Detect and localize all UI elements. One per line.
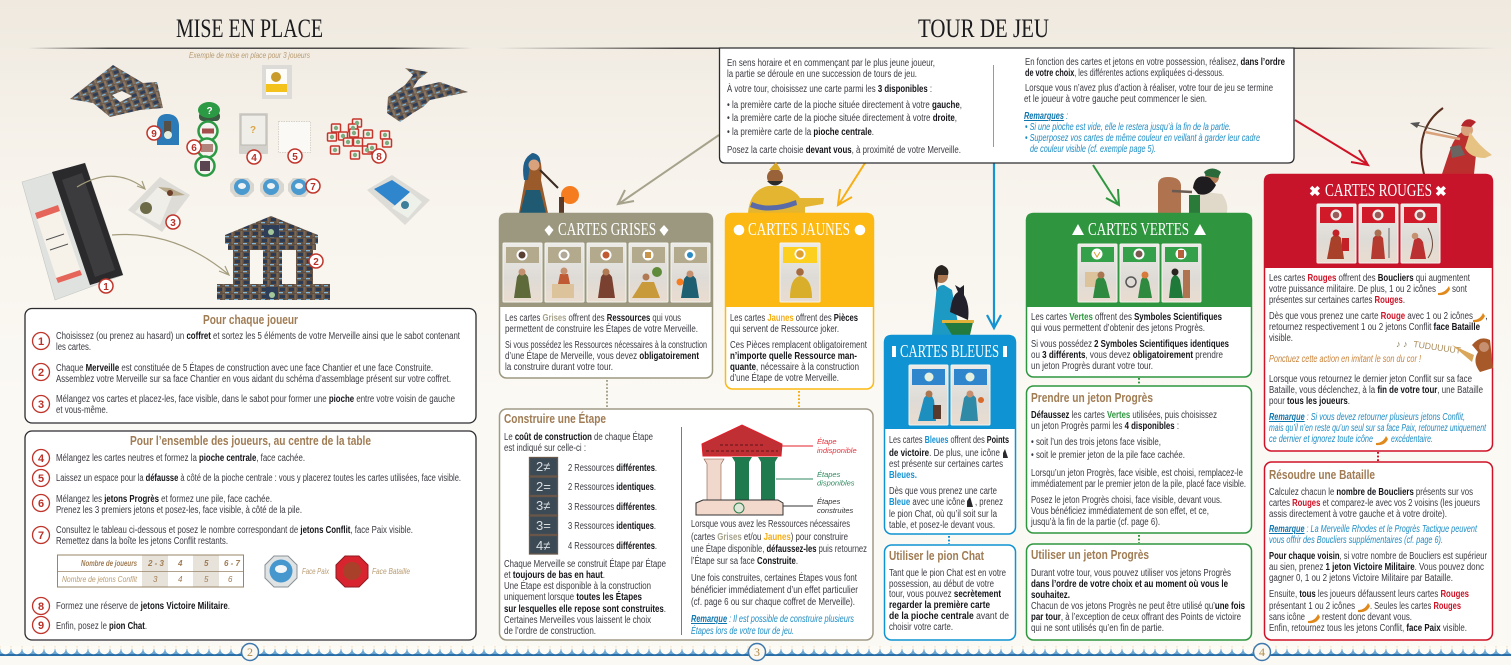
cost tiles: 2≠ — [536, 459, 550, 474]
figure: sculptor — [1158, 168, 1227, 215]
setup number markers: 8 — [376, 152, 382, 163]
description: Ces Pièces remplacent obligatoirement — [730, 340, 867, 351]
heading: Utiliser le pion Chat — [889, 548, 985, 563]
page number 3: 3 — [754, 645, 760, 659]
description — [1031, 312, 1229, 372]
description: Les cartes Vertes offrent des Symboles Scientifiques — [1031, 312, 1222, 323]
step 9: 9 — [38, 620, 44, 632]
description: Défaussez les cartes Vertes utilisées, puis choisissez — [1031, 410, 1217, 421]
arrow: green cards — [1093, 165, 1119, 205]
right column: Lorsque vous avez les Ressources nécessaires — [691, 519, 850, 530]
conflict tokens — [230, 178, 310, 197]
description: Si vous possédez 2 Symboles Scientifiques identiques — [1031, 339, 1229, 350]
description: un jeton Progrès durant votre tour. — [1031, 361, 1153, 372]
description — [1269, 273, 1488, 445]
panel: pour l'ensemble des joueurs — [25, 431, 476, 640]
description: Tant que le pion Chat est en votre — [889, 568, 1006, 579]
right column: En fonction des cartes et jetons en votre possession, réalisez, dans l’ordre — [1025, 57, 1285, 68]
table: conflict tokens per player count: 5 — [204, 575, 209, 584]
cost labels: 3 Ressources identiques. — [568, 521, 656, 532]
description — [889, 568, 1009, 633]
step 7: Remettez dans la boîte les jetons Conflit restants. — [56, 536, 228, 547]
description: Ponctuez cette action en imitant le son du cor ! — [1269, 354, 1421, 365]
label: unavailable: Étape — [817, 437, 837, 446]
table: conflict tokens per player count — [58, 555, 244, 587]
right column — [1024, 57, 1285, 155]
panel: cartes grises — [499, 213, 713, 378]
description: • soit le premier jeton de la pile face cachée. — [1031, 450, 1185, 461]
page number 4 — [1254, 644, 1270, 660]
page number 2 — [242, 644, 258, 660]
table: conflict tokens per player count: 6 - 7 — [224, 559, 241, 568]
progress tokens: ? — [206, 106, 213, 117]
description: retournez respectivement 1 ou 2 jetons Conflit face Bataille — [1269, 322, 1480, 333]
heading: CARTES GRISES — [558, 219, 656, 239]
table: conflict tokens per player count: 6 — [228, 575, 233, 584]
description: Les cartes Grises offrent des Ressources qui vous — [505, 313, 681, 324]
cost labels: 2 Ressources différentes. — [568, 463, 657, 474]
description: Dès que vous prenez une carte Rouge avec 1 ou 2 icônes — [1269, 311, 1473, 322]
figure: glassblower — [519, 153, 579, 219]
left column: et toujours de bas en haut. — [504, 570, 605, 581]
description: regarder la première carte — [889, 600, 990, 611]
description: restent donc devant vous. — [1322, 612, 1412, 623]
description: Chacun de vos jetons Progrès ne peut être utilisé qu’une fois — [1031, 601, 1245, 612]
step 6: Mélangez les jetons Progrès et formez une pile, face cachée. — [56, 494, 272, 505]
step 3 — [32, 394, 455, 416]
description: permettent de construire les Étapes de votre Merveille. — [505, 322, 698, 335]
cost tiles: 2= — [536, 479, 551, 494]
description: pour tous les joueurs. — [1269, 396, 1350, 407]
description: Lorsqu’un jeton Progrès, face visible, est choisi, remplacez-le — [1031, 468, 1243, 479]
description: assis directement à votre gauche et à votre droite). — [1269, 509, 1447, 520]
title: Tour de jeu: TOUR DE JEU — [918, 14, 1049, 43]
illustration: game setup for 3 players — [22, 65, 468, 300]
cost labels — [568, 463, 657, 552]
right column: une Étape disponible, défaussez-les puis retournez — [691, 542, 867, 555]
step 9 — [32, 616, 147, 634]
panel: cartes jaunes — [725, 213, 874, 389]
description: ou 3 différents, vous devez obligatoirement prendre — [1031, 350, 1223, 361]
page number 3 — [748, 644, 766, 660]
description: souhaitez. — [1031, 590, 1070, 601]
description: Les cartes Jaunes offrent des Pièces — [730, 313, 858, 324]
setup number markers: 5 — [292, 152, 298, 163]
cost tiles: 3≠ — [536, 498, 550, 513]
setup number markers: 3 — [170, 218, 176, 229]
step 3: 3 — [38, 399, 44, 411]
description — [889, 435, 1009, 531]
cost tiles: 3= — [536, 518, 551, 533]
step 8: Formez une réserve de jetons Victoire Militaire. — [56, 601, 230, 612]
description: , prenez — [975, 497, 1003, 508]
heading: CARTES VERTES — [1088, 219, 1189, 239]
right column: de couleur visible (cf. exemple page 5). — [1030, 144, 1156, 155]
cost labels: 4 Ressources différentes. — [568, 541, 657, 552]
figure: priestess with cat — [932, 265, 974, 335]
description: d’une Étape de votre Merveille. — [730, 371, 839, 384]
description: jusqu’à la fin de la partie (cf. page 6). — [1030, 517, 1160, 528]
description — [1031, 568, 1245, 634]
right column: Remarques : — [1024, 111, 1068, 122]
cost labels: 2 Ressources identiques. — [568, 482, 656, 493]
heading: ✖ — [1309, 185, 1321, 200]
cost labels: 3 Ressources différentes. — [568, 502, 657, 513]
step 6: Prenez les 3 premiers jetons et posez-les, face visible, à côté de la pile. — [56, 505, 302, 516]
left column: de l’ordre de construction. — [504, 626, 596, 637]
page number 4: 4 — [1259, 645, 1265, 659]
discard space — [278, 122, 310, 152]
label: available: Étapes — [817, 470, 840, 479]
herald with horn — [1396, 338, 1493, 372]
heading: CARTES BLEUES — [900, 341, 999, 361]
right column: bénéficier immédiatement d’un effet particulier — [691, 585, 859, 596]
description: table, et posez-le devant vous. — [889, 520, 995, 531]
step 1: 1 — [38, 336, 44, 348]
description: présentes sur certaines cartes Rouges. — [1269, 295, 1405, 306]
description: Si vous possédez les Ressources nécessaires à la construction — [505, 340, 707, 351]
cards — [1078, 244, 1201, 302]
left draw deck — [128, 177, 190, 232]
footer band — [0, 646, 1511, 656]
description: Bleues. — [889, 470, 917, 481]
setup number markers: 7 — [310, 182, 316, 193]
description: est présente sur certaines cartes — [889, 459, 1003, 470]
description: Les cartes Bleues offrent des Points — [889, 435, 1009, 446]
progress tokens — [196, 102, 220, 176]
cards — [503, 243, 710, 302]
panel: pour chaque joueur — [25, 308, 476, 423]
subtitle: example caption: Exemple de mise en place pour 3 joueurs — [189, 50, 311, 60]
step 4: Mélangez les cartes neutres et formez la pioche centrale, face cachée. — [56, 453, 305, 464]
left column: Chaque Merveille se construit Étape par Étape — [504, 557, 666, 570]
table: conflict tokens per player count: Nombre de joueurs — [81, 559, 137, 568]
central draw pile — [239, 113, 268, 154]
right draw deck — [367, 175, 430, 225]
left column: Posez la carte choisie devant vous, à proximité de votre Merveille. — [727, 145, 961, 156]
setup number markers: 2 — [313, 257, 319, 268]
right column: Étapes lors de votre tour de jeu. — [691, 624, 794, 637]
step 6 — [32, 494, 302, 516]
right column: • Si une pioche est vide, elle le restera jusqu’à la fin de la partie. — [1025, 122, 1231, 133]
step 5 — [32, 470, 461, 486]
heading: Prendre un jeton Progrès — [1031, 390, 1153, 405]
left column: sur lesquelles elle repose sont construites. — [504, 604, 666, 615]
step 9: Enfin, posez le pion Chat. — [56, 621, 147, 632]
arrow: tray to wonder — [112, 234, 229, 275]
step 1 — [32, 331, 460, 353]
heading: CARTES JAUNES — [748, 219, 850, 239]
setup number markers: 6 — [191, 143, 197, 154]
yellow draw deck — [262, 65, 292, 99]
token: battle face — [336, 556, 410, 587]
right column: (cf. page 6 ou sur chaque coffret de Merveille). — [691, 597, 855, 608]
description: par tour, à l’exception de ceux offrant des Points de victoire — [1031, 612, 1241, 623]
panel: intro — [720, 48, 1294, 163]
description — [1030, 410, 1246, 528]
heading: Pour chaque joueur — [203, 312, 298, 327]
arrow: blue cards — [987, 163, 1001, 328]
description: possession, au début de votre — [889, 579, 994, 590]
heading: Construire une Étape — [504, 411, 606, 426]
description: n’importe quelle Ressource man- — [730, 351, 857, 362]
arrow: yellow cards — [838, 163, 865, 205]
description: immédiatement par le premier jeton de la pile, placé face visible. — [1031, 479, 1246, 490]
figure: archer — [1410, 108, 1492, 178]
token: battle face: Face Bataille — [372, 566, 410, 576]
arrow: grey cards — [618, 135, 719, 204]
title: Mise en place: MISE EN PLACE — [176, 14, 323, 43]
left column: est indiqué sur celle-ci : — [504, 443, 586, 454]
description: le pion Chat, où qu’il soit sur la — [889, 509, 997, 520]
step 5: 5 — [38, 473, 44, 485]
panel: prendre un jeton progrès — [1026, 386, 1252, 533]
heading: Pour l’ensemble des joueurs, au centre de la table — [130, 433, 371, 448]
right column: Lorsque vous n’avez plus d’action à réaliser, votre tour de jeu se termine — [1025, 83, 1273, 94]
step 7: 7 — [38, 530, 44, 542]
arrow: red cards — [1295, 120, 1368, 165]
description: qui ne sont utilisés qu’en fin de partie. — [1031, 623, 1164, 634]
table: conflict tokens per player count: Nombre de jetons Conflit — [62, 575, 138, 584]
panel: cartes rouges — [1264, 174, 1493, 451]
description: présentant 1 ou 2 icônes — [1269, 601, 1355, 612]
cat pawn — [157, 114, 179, 145]
description — [505, 313, 707, 373]
description: Les cartes Rouges offrent des Boucliers qui augmentent — [1269, 273, 1470, 284]
token: peace face: Face Paix — [302, 566, 330, 576]
panel: cartes vertes — [1026, 213, 1252, 377]
wonder: top-left — [70, 65, 163, 117]
description: visible. — [1269, 333, 1293, 344]
herald with horn: TUDUUUUT — [1413, 339, 1462, 356]
cards — [1317, 204, 1440, 263]
temple diagram — [696, 425, 857, 515]
description: tour, vous pouvez secrètement — [889, 589, 1002, 600]
step 2: Assemblez votre Merveille sur sa face Chantier en vous aidant du schéma d’assemblage présent sur votre coffret. — [56, 374, 451, 385]
coffret tray — [22, 163, 123, 300]
cost tiles — [530, 458, 558, 554]
left column: la partie se déroule en une succession de tours de jeu. — [727, 69, 917, 80]
right column: Remarque : Il est possible de construire plusieurs — [691, 614, 854, 625]
step 3: Mélangez vos cartes et placez-les, face visible, dans le sabot pour former une pioche entre votre voisin de gauche — [56, 394, 455, 405]
description: Vous bénéficiez immédiatement de son effet, et ce, — [1031, 506, 1209, 517]
description: qui servent de Ressource joker. — [730, 324, 839, 335]
wonder: top-right — [387, 68, 468, 122]
description: Durant votre tour, vous pouvez utiliser vos jetons Progrès — [1031, 568, 1231, 579]
setup number markers — [99, 126, 386, 293]
heading: Utiliser un jeton Progrès — [1031, 547, 1149, 562]
heading: CARTES ROUGES — [1325, 180, 1432, 200]
left column: • la première carte de la pioche centrale. — [727, 127, 874, 138]
step 5: Laissez un espace pour la défausse à côté de la pioche centrale : vous y placerez toutes les cartes utilisées, face visible. — [56, 473, 461, 484]
panel: cartes bleues — [884, 335, 1016, 534]
description: Enfin, retournez tous les jetons Conflit, face Paix visible. — [1269, 623, 1467, 634]
panel: utiliser un jeton progrès — [1026, 544, 1252, 640]
player wonder — [217, 216, 330, 300]
description: Bleue avec une icône — [889, 497, 965, 508]
table: conflict tokens per player count: 3 — [153, 575, 158, 584]
arrow: tray to left deck — [77, 176, 145, 189]
herald with horn: ♪ ♪ — [1396, 339, 1408, 349]
description: , — [1485, 311, 1488, 322]
step 4: 4 — [38, 453, 45, 465]
right column: • Superposez vos cartes de même couleur en veillant à garder leur cadre — [1025, 133, 1260, 144]
right column: Une fois construites, certaines Étapes vous font — [691, 571, 857, 584]
description: Ensuite, tous les joueurs défaussent leurs cartes Rouges — [1269, 589, 1469, 600]
left column: En sens horaire et en commençant par le plus jeune joueur, — [727, 58, 935, 69]
step 3: et vous-même. — [56, 405, 108, 416]
description: dans l’ordre de votre choix et au moment où vous le — [1031, 579, 1228, 590]
left column — [504, 430, 666, 637]
setup number markers: 4 — [251, 153, 257, 164]
left column: Le coût de construction de chaque Étape — [504, 430, 653, 443]
description: ce dernier et ignorez toute icône — [1269, 434, 1373, 445]
left column: • la première carte de la pioche située directement à votre gauche, — [727, 100, 962, 111]
description: au sien, prenez 1 jeton Victoire Militaire. Vous pouvez donc — [1269, 562, 1484, 573]
description: sans icône — [1269, 612, 1305, 623]
table: conflict tokens per player count: 5 — [204, 559, 209, 568]
page number 2: 2 — [247, 645, 253, 659]
step 6: 6 — [38, 498, 44, 510]
left column — [727, 58, 962, 156]
right column: de votre choix, les différentes actions expliquées ci-dessous. — [1025, 68, 1224, 79]
description: d’une Étape de Merveille, vous devez obligatoirement — [505, 349, 700, 362]
description: • soit l’un des trois jetons face visible, — [1031, 437, 1161, 448]
description: Bataille, vous déclenchez, à la fin de votre tour, une Bataille — [1269, 385, 1483, 396]
setup number markers: 1 — [103, 282, 109, 293]
left column: Certaines Merveilles vous laissent le choix — [504, 615, 651, 626]
description: Dès que vous prenez une carte — [889, 486, 997, 497]
setup number markers: 9 — [151, 129, 157, 140]
label: available: disponibles — [817, 478, 855, 488]
left column: uniquement lorsque toutes les Étapes — [504, 590, 642, 603]
right column: (cartes Grises et/ou Jaunes) pour construire — [691, 532, 848, 543]
description: de victoire. De plus, une icône — [889, 448, 1000, 459]
label: built: Étapes — [817, 497, 840, 506]
description: sont — [1452, 284, 1467, 295]
description: de la pioche centrale avant de — [889, 611, 1009, 622]
step 2: 2 — [38, 367, 44, 379]
right column — [691, 519, 867, 637]
step 1: les cartes. — [56, 342, 91, 353]
cards — [909, 365, 990, 425]
step 8: 8 — [38, 601, 44, 613]
left column: • la première carte de la pioche située directement à votre droite, — [727, 113, 957, 124]
military victory tokens — [328, 119, 392, 159]
description: excédentaire. — [1391, 434, 1433, 445]
label: unavailable: indisponible — [817, 446, 857, 455]
heading: ✖ — [1435, 185, 1447, 200]
label: built: construites — [817, 506, 854, 515]
description: votre puissance militaire. De plus, 1 ou 2 icônes — [1269, 284, 1436, 295]
step 2 — [32, 361, 451, 385]
card — [780, 243, 820, 302]
description: Posez le jeton Progrès choisi, face visible, devant vous. — [1031, 495, 1222, 506]
description: . Seules les cartes Rouges — [1370, 601, 1461, 612]
description: gagner 0, 1 ou 2 jetons Victoire Militaire par Bataille. — [1269, 573, 1453, 584]
right column: et le joueur à votre gauche peut commencer le sien. — [1024, 94, 1207, 105]
step 4 — [32, 450, 305, 466]
step 7 — [32, 525, 413, 547]
left column: À votre tour, choisissez une carte parmi les 3 disponibles : — [727, 82, 932, 95]
description: la construire durant votre tour. — [505, 362, 613, 373]
table: conflict tokens per player count: 4 — [177, 559, 183, 568]
step 8 — [32, 598, 230, 614]
heading: Résoudre une Bataille — [1269, 467, 1375, 482]
description: Calculez chacun le nombre de Boucliers présents sur vos — [1269, 487, 1473, 498]
description: vous offrir des Boucliers supplémentaires (cf. page 6). — [1269, 535, 1443, 546]
cost tiles: 4≠ — [536, 538, 550, 553]
table: conflict tokens per player count: 4 — [178, 575, 183, 584]
table: conflict tokens per player count: 2 - 3 — [147, 559, 165, 568]
description: qui vous permettent d’obtenir des jetons Progrès. — [1031, 323, 1205, 334]
panel: utiliser le pion chat — [884, 545, 1016, 640]
panel: résoudre une bataille — [1264, 462, 1492, 640]
description: quante, nécessaire à la construction — [730, 362, 859, 373]
description — [730, 313, 867, 384]
right column: l’Étape sur sa face Construite. — [691, 554, 798, 567]
description — [1269, 487, 1488, 634]
left column: Une Étape est disponible à la construction — [504, 579, 651, 592]
step 1: Choisissez (ou prenez au hasard) un coffret et sortez les 5 éléments de votre Merveille ainsi que le sabot contenant — [56, 331, 460, 342]
step 7: Consultez le tableau ci-dessous et posez le nombre correspondant de jetons Conflit, face Paix visible. — [56, 525, 413, 536]
panel: construire une étape — [500, 409, 873, 640]
description: choisir votre carte. — [889, 622, 953, 633]
figure: merchant — [748, 162, 824, 213]
description: un jeton Progrès parmi les 4 disponibles : — [1031, 421, 1179, 432]
step 2: Chaque Merveille est constituée de 5 Étapes de construction avec une face Chantier et une face Construite. — [56, 361, 433, 374]
token: peace face — [265, 556, 330, 587]
central draw pile: ? — [250, 125, 256, 136]
